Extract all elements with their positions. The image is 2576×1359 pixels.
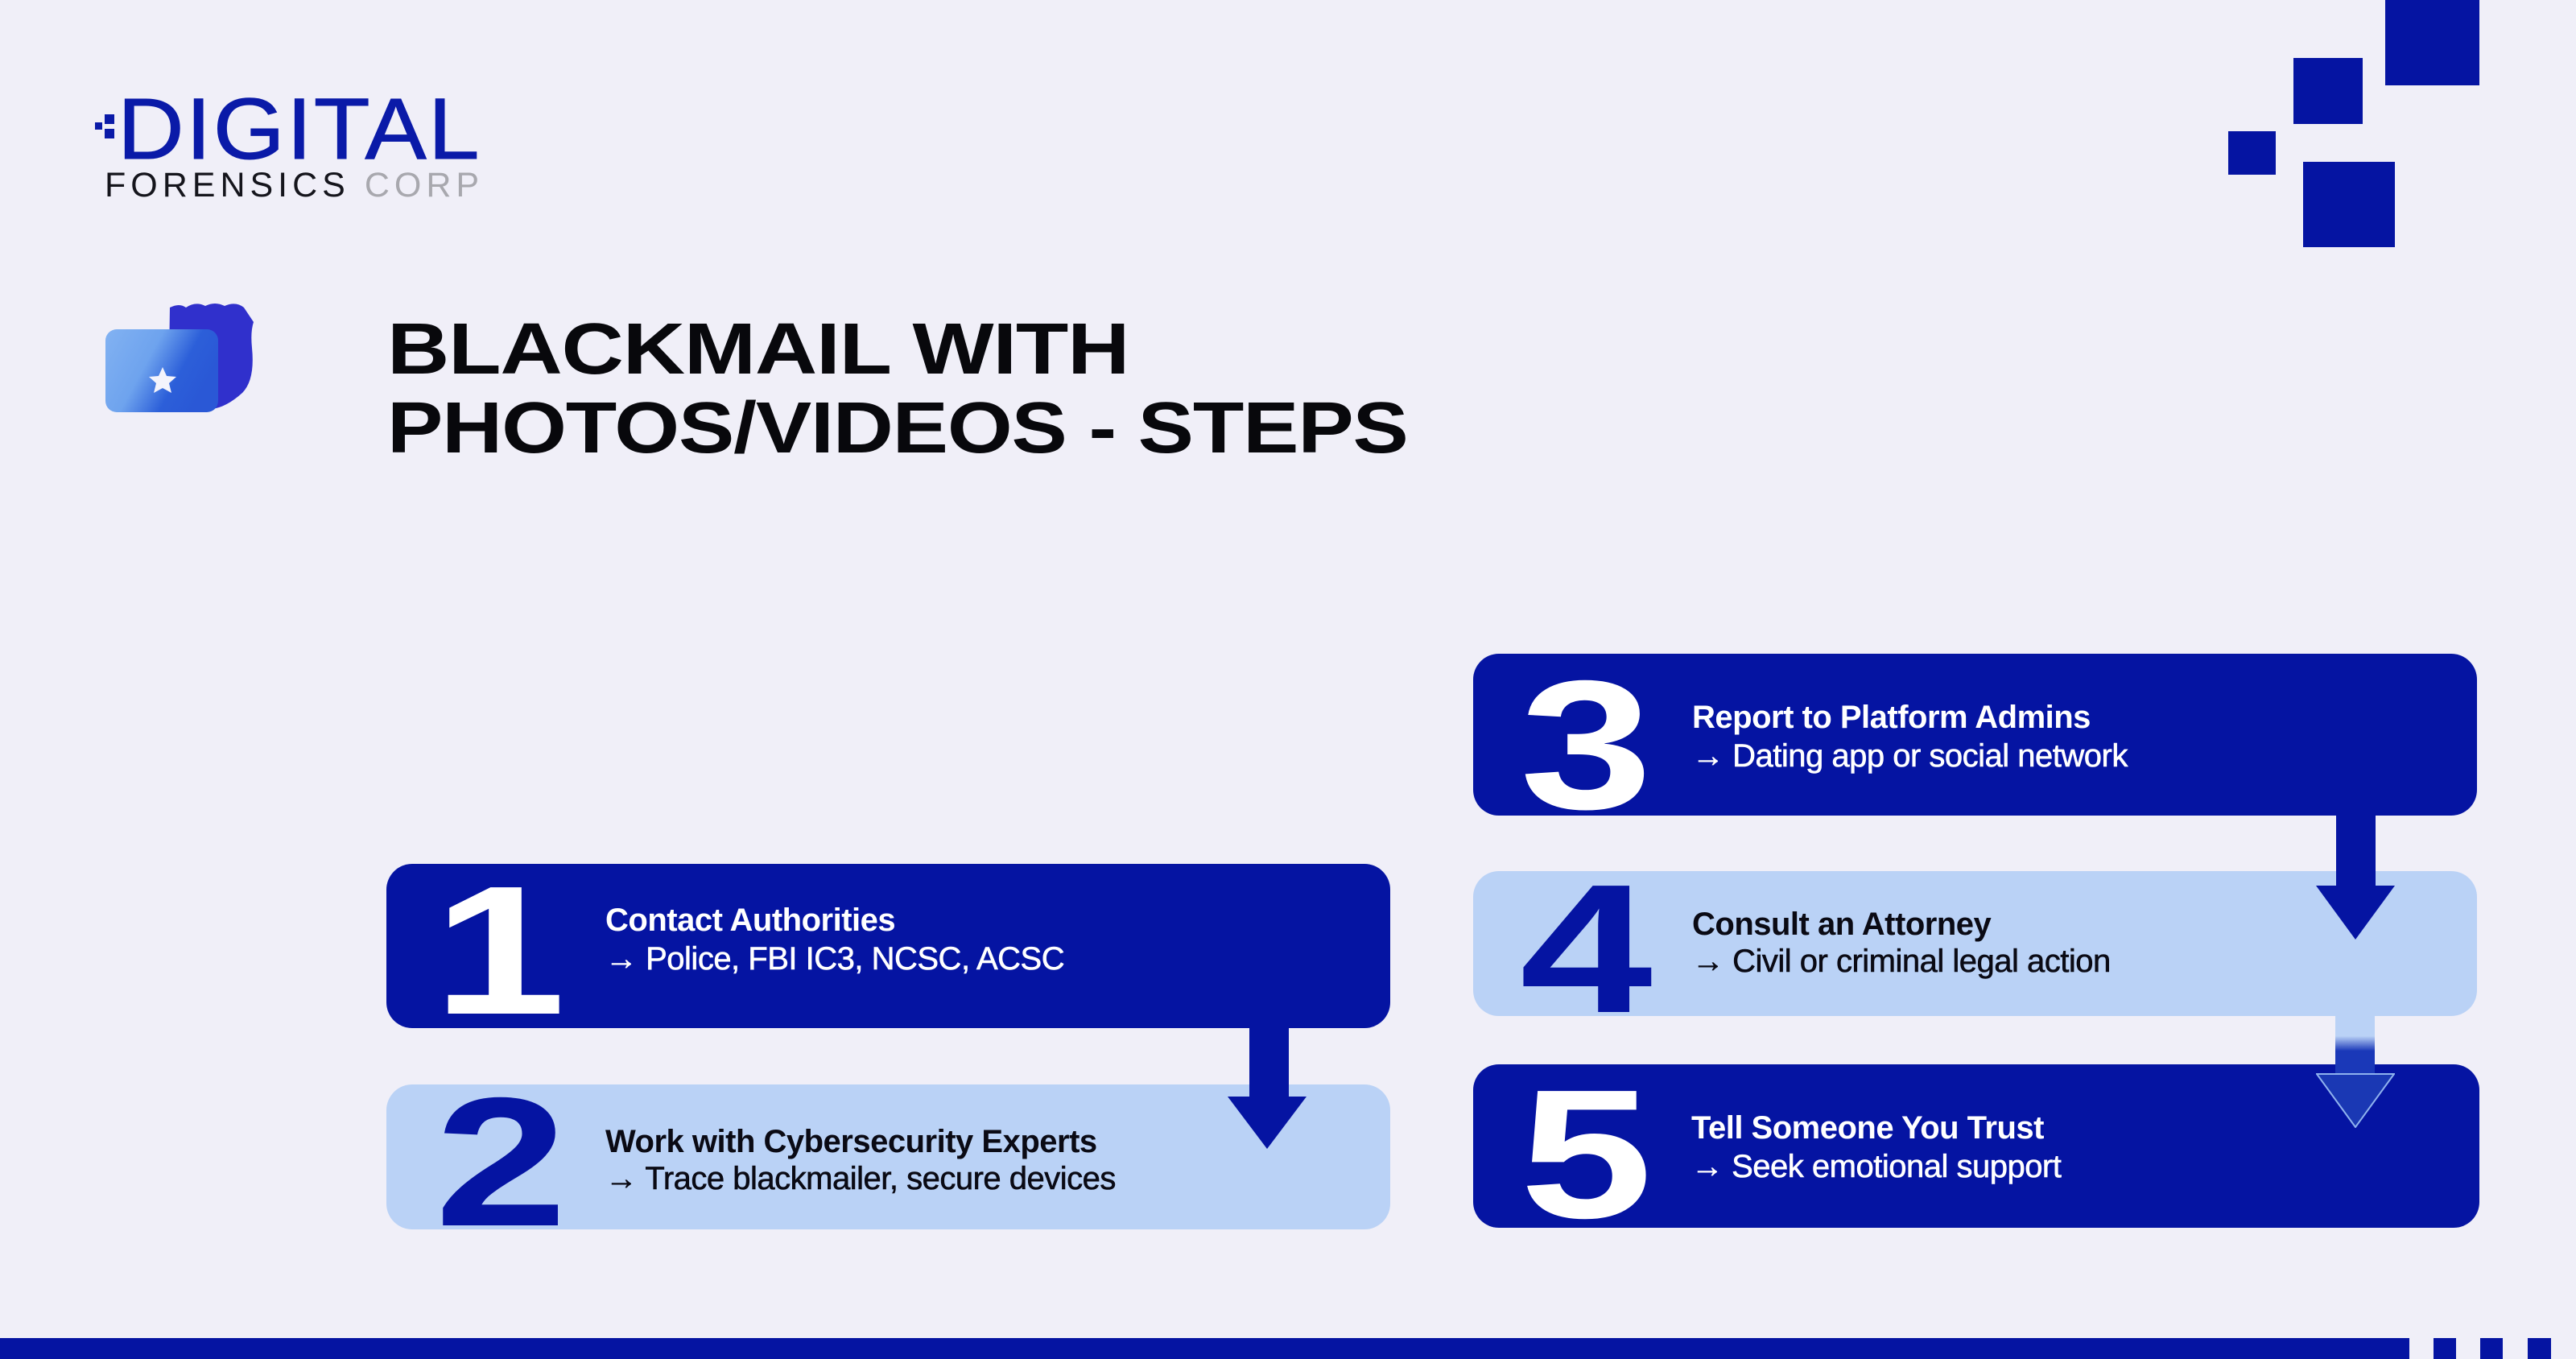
step 1: Contact Authorities xyxy=(605,903,895,938)
step 2: Work with Cybersecurity Experts xyxy=(605,1124,1097,1159)
logo xyxy=(95,80,484,204)
step 1 xyxy=(386,864,1390,1028)
logo pixel squares xyxy=(95,114,114,138)
arrow: step 1 to 2 xyxy=(1228,1028,1307,1149)
step 3 xyxy=(1473,654,2477,816)
step 2 xyxy=(386,1084,1390,1229)
step 3: → Dating app or social network xyxy=(1692,738,2128,774)
step 5: Tell Someone You Trust xyxy=(1691,1110,2044,1146)
step 2: 2 xyxy=(435,1060,567,1265)
title xyxy=(387,309,1408,469)
step 5: 5 xyxy=(1520,1052,1652,1257)
bottom bar xyxy=(0,1338,2551,1359)
step 3: Report to Platform Admins xyxy=(1692,700,2091,735)
logo subtitle: FORENSICS CORP xyxy=(105,166,484,204)
step 4: Consult an Attorney xyxy=(1692,907,1991,942)
step 3: 3 xyxy=(1520,643,1652,848)
arrow: step 4 to 5 xyxy=(2316,1016,2395,1128)
title: PHOTOS/VIDEOS - STEPS xyxy=(387,388,1408,469)
step 4: 4 xyxy=(1520,847,1652,1051)
arrow: step 3 to 4 xyxy=(2316,816,2395,940)
icon: police badge xyxy=(105,304,254,412)
decorative squares top right xyxy=(2228,0,2479,247)
step 2: → Trace blackmailer, secure devices xyxy=(605,1161,1116,1196)
logo wordmark DIGITAL: DIGITAL xyxy=(118,80,481,177)
step 4 xyxy=(1473,871,2477,1016)
step 5 xyxy=(1473,1064,2479,1228)
step 4: → Civil or criminal legal action xyxy=(1692,944,2111,979)
step 1: 1 xyxy=(433,849,565,1053)
step 5: → Seek emotional support xyxy=(1691,1149,2061,1184)
step 1: → Police, FBI IC3, NCSC, ACSC xyxy=(605,941,1064,977)
title: BLACKMAIL WITH xyxy=(387,309,1129,390)
